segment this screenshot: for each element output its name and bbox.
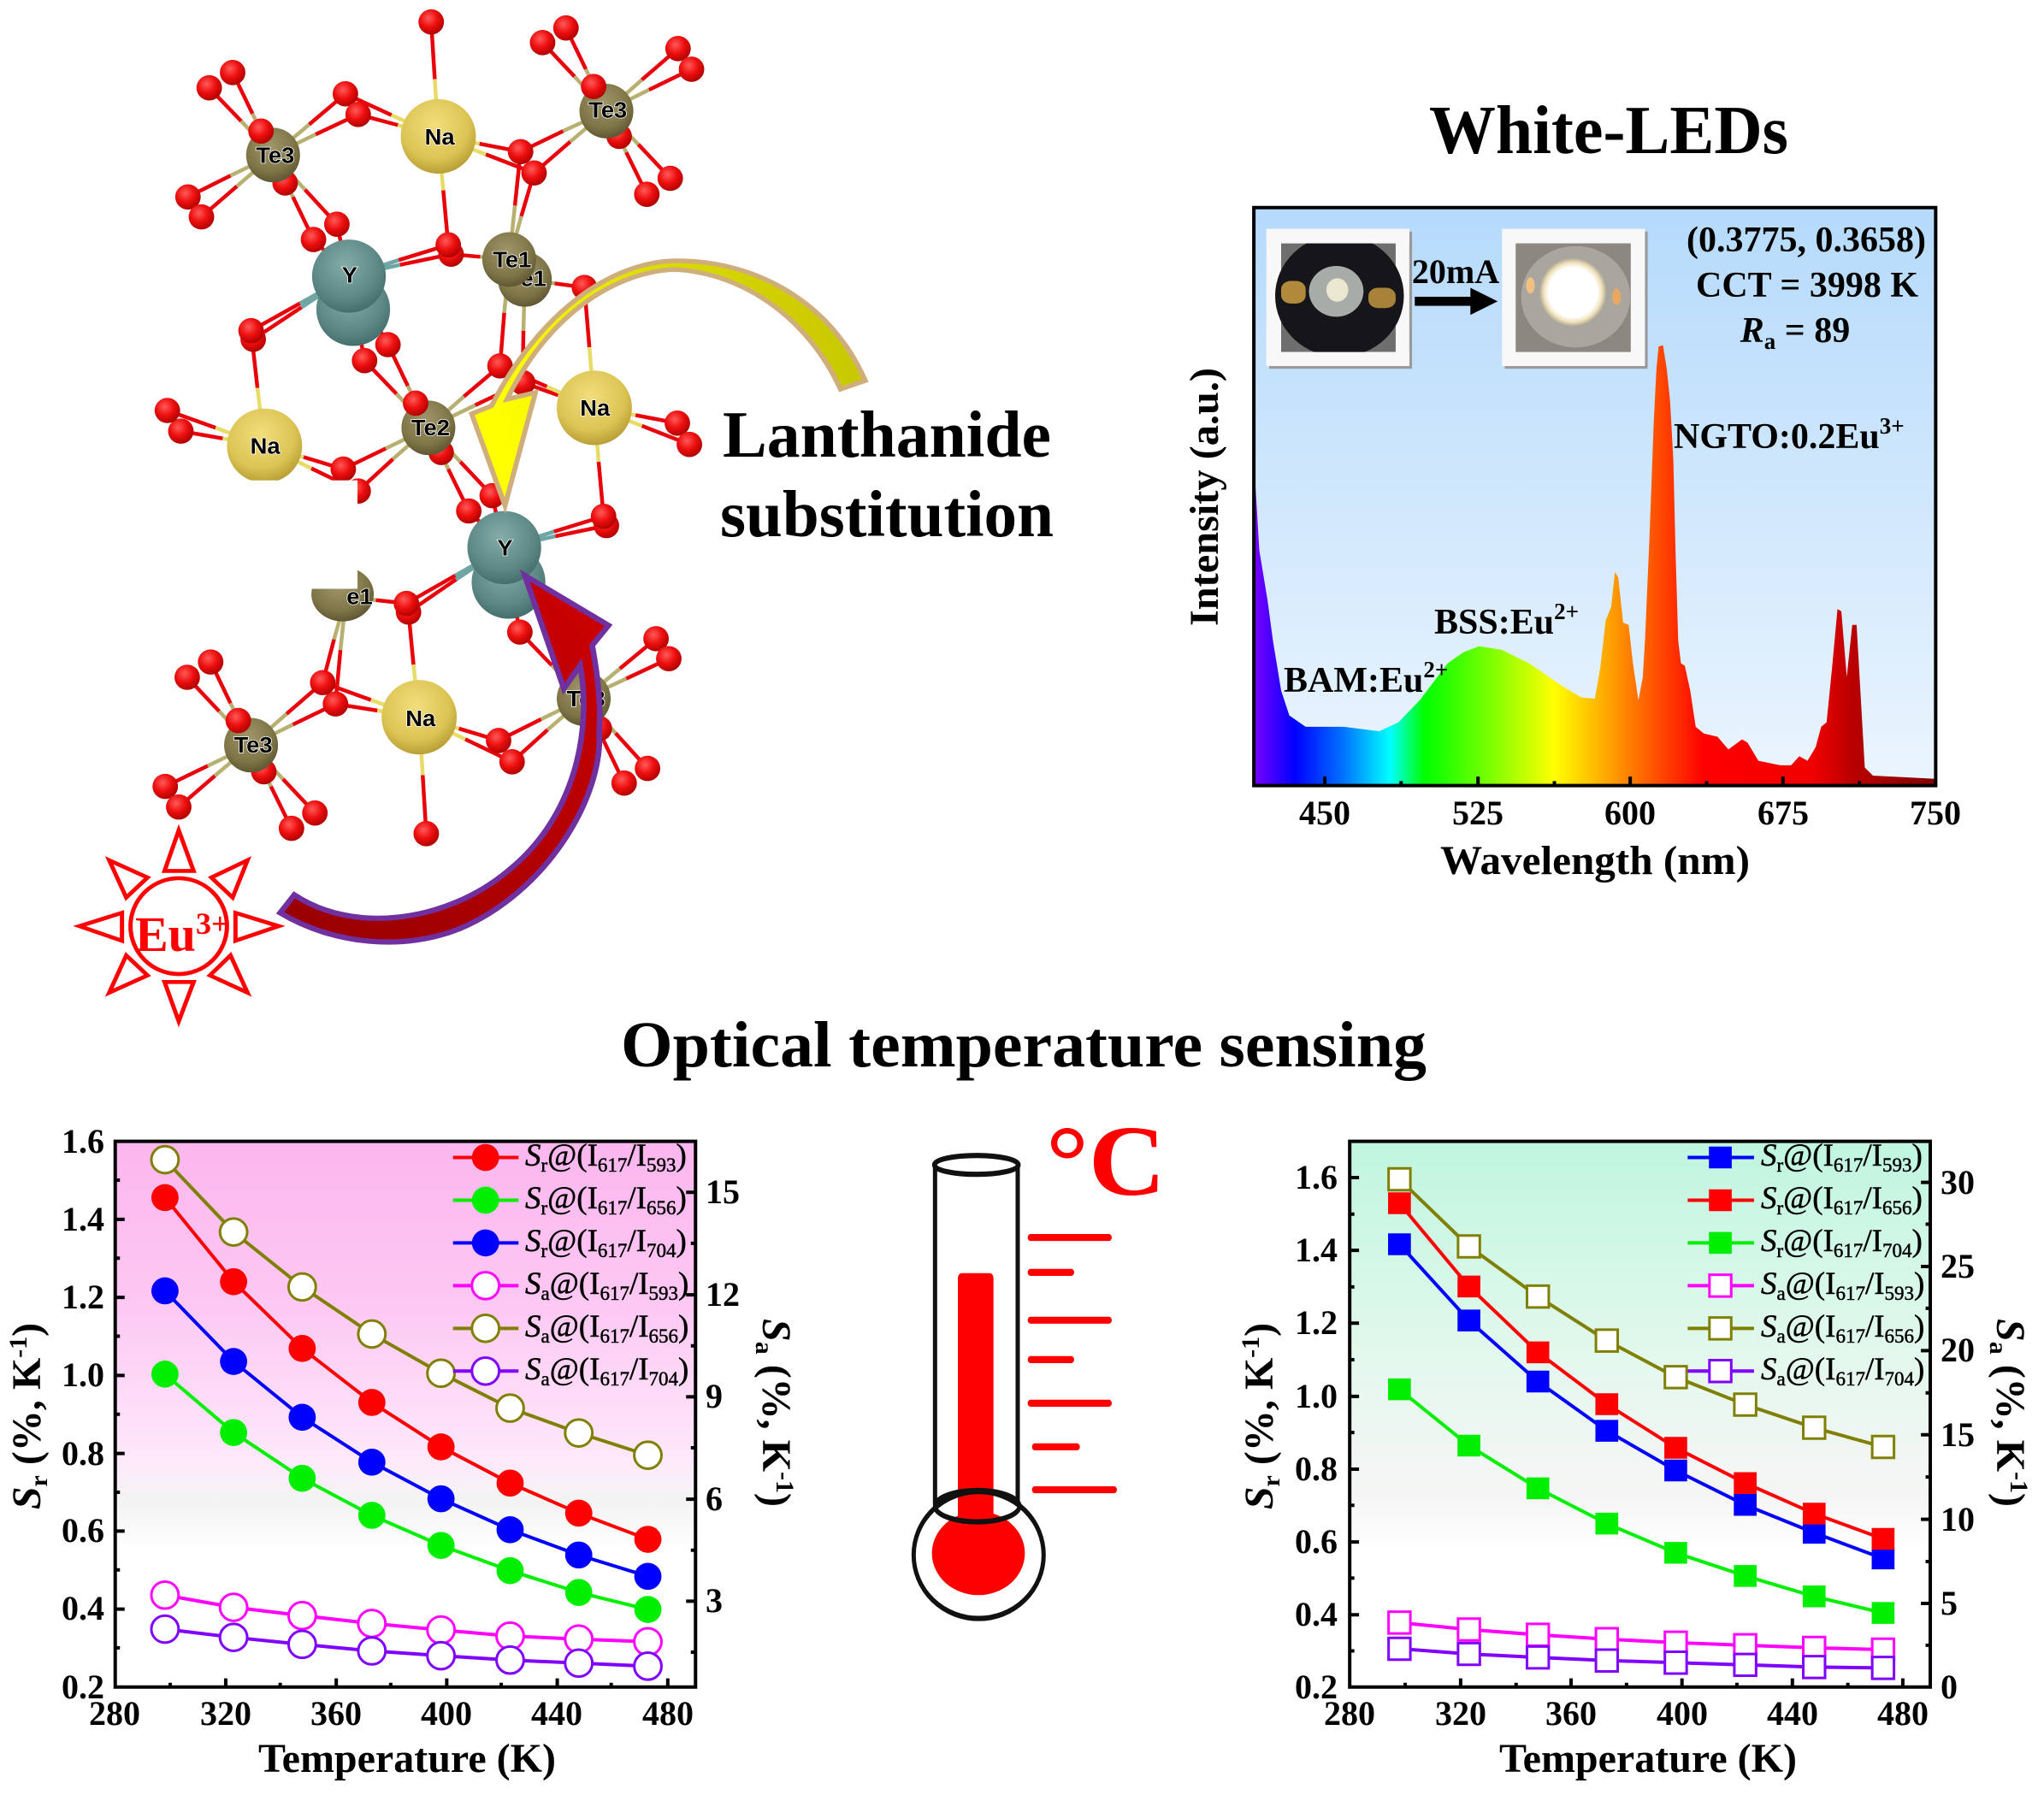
legend text: S xyxy=(525,1352,541,1387)
series: Sr I617/I656 xyxy=(1388,1192,1894,1550)
bottom axis tick labels: 320 xyxy=(200,1694,251,1733)
legend text: 656 xyxy=(1885,1326,1914,1347)
left axis tick labels: 1.0 xyxy=(62,1355,104,1394)
left y-axis title: r xyxy=(25,1475,53,1486)
legend text: 656 xyxy=(649,1326,678,1347)
right axis tick labels: 3 xyxy=(706,1581,723,1620)
oxygen atoms xyxy=(168,9,704,784)
bottom axis tick labels: 400 xyxy=(1657,1694,1708,1733)
legend text: S xyxy=(525,1181,541,1216)
bottom axis tick labels xyxy=(89,1694,694,1733)
legend text: @(I xyxy=(1786,1267,1835,1302)
bottom axis tick labels xyxy=(1324,1694,1929,1733)
icon: thermometer xyxy=(913,1155,1114,1619)
left axis tick labels: 1.6 xyxy=(1295,1158,1338,1196)
panel: White-LED spectrum xyxy=(1182,208,1961,883)
legend text: ) xyxy=(678,1309,688,1344)
legend text: 593 xyxy=(1882,1154,1912,1176)
right axis tick labels: 30 xyxy=(1941,1163,1975,1202)
x-axis tick labels: 600 xyxy=(1604,794,1656,832)
front atoms xyxy=(152,74,702,847)
legend text: a xyxy=(1777,1326,1786,1347)
legend text: /I xyxy=(627,1224,647,1259)
right axis tick labels: 25 xyxy=(1941,1247,1975,1285)
right axis tick labels: 15 xyxy=(706,1172,740,1211)
atom labels: Na xyxy=(405,706,436,731)
series: Sr I617/I656 xyxy=(151,1361,661,1623)
mercury xyxy=(932,1273,1025,1595)
x-axis tick labels: 450 xyxy=(1299,794,1350,832)
bonds xyxy=(165,22,692,834)
legend text: a xyxy=(1777,1368,1786,1390)
legend text: r xyxy=(1777,1197,1784,1219)
right axis tick labels: 5 xyxy=(1941,1584,1958,1622)
legend text: @(I xyxy=(547,1138,598,1173)
left y-axis title: ) xyxy=(4,1323,50,1337)
legend text: /I xyxy=(627,1181,647,1216)
x-axis tick labels xyxy=(1299,794,1961,832)
atom labels: Te3 xyxy=(588,97,627,123)
legend text: /I xyxy=(1863,1181,1882,1216)
x-axis tick labels: 525 xyxy=(1452,794,1503,832)
Eu3+ label: Eu xyxy=(135,906,196,962)
legend text: /I xyxy=(629,1309,649,1344)
right axis tick labels: 12 xyxy=(706,1275,740,1314)
y-axis title: Intensity (a.u.) xyxy=(1182,368,1227,626)
right axis tick labels: 0 xyxy=(1941,1668,1958,1706)
left y-axis title: -1 xyxy=(1237,1337,1265,1358)
legend text: 617 xyxy=(598,1240,627,1261)
series: Sa I617/I704 xyxy=(1389,1638,1894,1679)
legend text: @(I xyxy=(550,1309,600,1344)
arrow: Eu3+ doping (red) xyxy=(281,576,609,942)
x-axis tick labels: 675 xyxy=(1757,794,1809,832)
bottom axis tick labels: 480 xyxy=(1877,1694,1929,1733)
right axis tick labels: 9 xyxy=(706,1377,723,1415)
atom labels: Te3 xyxy=(256,143,294,168)
legend text: a xyxy=(541,1283,550,1304)
left y-axis title: S xyxy=(4,1486,50,1509)
LED coordinates: (0.3775, 0.3658) xyxy=(1687,221,1926,260)
legend text: r xyxy=(1777,1154,1784,1176)
bottom axis tick labels: 280 xyxy=(1324,1694,1375,1733)
atom labels: Na xyxy=(580,396,611,421)
left axis tick labels: 0.2 xyxy=(1295,1668,1338,1706)
left axis tick labels: 1.0 xyxy=(1295,1377,1338,1415)
heading: Lanthanide substitution xyxy=(720,398,1054,551)
series: Sr I617/I593 xyxy=(151,1184,661,1553)
legend markers xyxy=(1687,1147,1754,1382)
legend text: r xyxy=(1777,1240,1784,1261)
inset photo: LED off xyxy=(1267,229,1412,369)
label: BSS: 2+ xyxy=(1554,599,1579,624)
atom labels: Y xyxy=(497,535,513,560)
LED coordinates: a xyxy=(1764,328,1776,354)
LED coordinates: CCT = 3998 K xyxy=(1696,266,1918,305)
legend text: S xyxy=(1761,1181,1777,1216)
legend text: 617 xyxy=(600,1326,629,1347)
legend text: S xyxy=(1761,1138,1777,1173)
right y-axis title: S xyxy=(753,1319,799,1342)
right y-axis title: -1 xyxy=(771,1472,799,1493)
x-axis tick labels: 750 xyxy=(1910,794,1961,832)
legend text: 593 xyxy=(649,1283,678,1304)
left axis tick labels xyxy=(1295,1158,1338,1706)
legend text: ) xyxy=(1914,1267,1924,1302)
left axis tick labels: 0.4 xyxy=(1295,1595,1338,1633)
LED coordinates xyxy=(1687,221,1926,354)
left y-axis title: (%, K xyxy=(1237,1358,1282,1475)
bottom axis tick labels: 280 xyxy=(89,1694,140,1733)
scale marks xyxy=(1031,1237,1114,1490)
axes and ticks xyxy=(1350,1142,1930,1687)
right y-axis title: (%, K xyxy=(753,1355,799,1472)
legend text: 617 xyxy=(598,1197,627,1219)
left axis tick labels: 0.6 xyxy=(1295,1522,1338,1561)
white mask over the middle of the structure xyxy=(142,481,357,589)
bottom axis tick labels: 360 xyxy=(310,1694,362,1733)
legend text: 656 xyxy=(647,1197,676,1219)
legend text: 617 xyxy=(1834,1154,1863,1176)
x-axis title: Temperature (K) xyxy=(258,1736,556,1781)
legend text: @(I xyxy=(550,1267,600,1302)
legend text: 656 xyxy=(1882,1197,1912,1219)
atom labels xyxy=(234,97,627,758)
legend text: @(I xyxy=(1783,1224,1834,1259)
legend text: /I xyxy=(1865,1352,1885,1387)
series: Sr I617/I593 xyxy=(1388,1233,1894,1569)
left axis tick labels: 0.8 xyxy=(62,1434,104,1473)
back atoms: e1 xyxy=(520,266,546,291)
atom labels: Na xyxy=(251,434,281,458)
label: NGTO: 3+ xyxy=(1880,413,1905,439)
legend text: ) xyxy=(1912,1224,1923,1259)
label: BSS: BSS:Eu xyxy=(1434,603,1554,642)
right axis tick labels: 15 xyxy=(1941,1415,1975,1454)
right y-axis title: -1 xyxy=(2005,1472,2033,1493)
right axis tick labels: 20 xyxy=(1941,1331,1975,1369)
left y-axis title: S xyxy=(1237,1486,1282,1509)
right y-axis title: ) xyxy=(753,1493,799,1507)
atom labels: Na xyxy=(425,125,455,150)
legend text: r xyxy=(541,1197,547,1219)
legend text: /I xyxy=(1865,1309,1885,1344)
legend text: 704 xyxy=(649,1368,679,1390)
series: Sa I617/I656 xyxy=(1389,1168,1894,1458)
legend text: ) xyxy=(1914,1352,1924,1387)
legend text: @(I xyxy=(547,1224,598,1259)
bottom axis tick labels: 440 xyxy=(1767,1694,1818,1733)
back atoms xyxy=(316,252,552,619)
left y-axis title: r xyxy=(1257,1475,1285,1486)
legend text: /I xyxy=(1863,1138,1882,1173)
legend text: ) xyxy=(678,1267,688,1302)
left y-axis title: (%, K xyxy=(4,1358,50,1475)
chart: left sensitivity (circles) xyxy=(4,1122,799,1781)
legend text: S xyxy=(1761,1224,1777,1259)
emission spectrum xyxy=(1255,345,1935,786)
legend text: 704 xyxy=(647,1240,676,1261)
legend text: S xyxy=(525,1138,541,1173)
heading: Lanthanide substitution: substitution xyxy=(720,477,1054,551)
series: Sa I617/I656 xyxy=(151,1146,661,1468)
crystal structure with lanthanide substitution xyxy=(80,9,865,1021)
legend markers xyxy=(453,1144,518,1385)
icon: degree Celsius: °C xyxy=(1046,1105,1166,1217)
atom labels: Te2 xyxy=(411,416,450,440)
legend text: a xyxy=(541,1326,550,1347)
legend text: @(I xyxy=(1786,1309,1835,1344)
bottom axis tick labels: 480 xyxy=(642,1694,694,1733)
arrow: 20mA xyxy=(1415,287,1498,315)
legend text: @(I xyxy=(1783,1181,1834,1216)
plot area xyxy=(1350,1142,1930,1687)
legend text: 617 xyxy=(1834,1197,1863,1219)
series: Sa I617/I704 xyxy=(151,1615,661,1680)
legend text: S xyxy=(525,1224,541,1259)
icon: Eu3+ sun xyxy=(80,830,279,1021)
bottom axis tick labels: 360 xyxy=(1545,1694,1597,1733)
legend text: @(I xyxy=(1783,1138,1834,1173)
heading: Lanthanide substitution: Lanthanide xyxy=(723,398,1051,471)
legend text: r xyxy=(541,1240,547,1261)
legend text: 704 xyxy=(1882,1240,1912,1261)
spectrum plot xyxy=(1254,208,1935,786)
left axis tick labels: 1.4 xyxy=(1295,1231,1338,1269)
left axis tick labels: 1.2 xyxy=(62,1278,104,1316)
atom labels: Te3 xyxy=(566,687,606,712)
axes frame xyxy=(1254,208,1935,786)
legend text: ) xyxy=(676,1138,687,1173)
legend text: ) xyxy=(676,1181,687,1216)
bottom axis tick labels: 440 xyxy=(531,1694,582,1733)
legend text: 617 xyxy=(1834,1240,1863,1261)
Eu3+ label: 3+ xyxy=(196,906,228,941)
legend text: /I xyxy=(627,1138,647,1173)
legend text: @(I xyxy=(550,1352,600,1387)
chart: right sensitivity (squares) xyxy=(1237,1138,2033,1781)
legend text: S xyxy=(1761,1309,1777,1344)
legend text: ) xyxy=(1912,1138,1923,1173)
left axis tick labels: 1.2 xyxy=(1295,1303,1338,1342)
label: BAM: BAM:Eu xyxy=(1284,661,1423,700)
legend text: /I xyxy=(629,1267,649,1302)
legend text: @(I xyxy=(1786,1352,1835,1387)
left axis tick labels: 0.6 xyxy=(62,1511,104,1550)
right axis tick labels: 6 xyxy=(706,1479,723,1518)
left y-axis title: ) xyxy=(1237,1323,1282,1337)
series: Sa I617/I593 xyxy=(1389,1612,1894,1661)
right axis tick labels xyxy=(706,1172,740,1620)
right y-axis title: S xyxy=(1988,1319,2033,1342)
legend text: a xyxy=(541,1368,550,1390)
left axis tick labels: 1.6 xyxy=(62,1122,104,1160)
label: BAM: 2+ xyxy=(1423,657,1448,682)
axes and ticks xyxy=(115,1142,695,1687)
left axis tick labels: 0.2 xyxy=(62,1668,104,1706)
legend text: S xyxy=(525,1309,541,1344)
right axis tick labels: 10 xyxy=(1941,1500,1975,1538)
left axis tick labels: 0.8 xyxy=(1295,1450,1338,1488)
legend text: ) xyxy=(678,1352,688,1387)
legend text: a xyxy=(1777,1283,1786,1304)
arrow: lanthanide substitution (yellow) xyxy=(471,261,865,505)
legend text: 704 xyxy=(1885,1368,1915,1390)
label: 20mA: 20mA xyxy=(1412,252,1499,291)
heading: White-LEDs: White-LEDs xyxy=(1429,93,1788,168)
legend text: @(I xyxy=(547,1181,598,1216)
right y-axis title: a xyxy=(1984,1342,2012,1355)
legend text: 593 xyxy=(647,1154,676,1176)
glass outline xyxy=(913,1155,1043,1619)
legend text: ) xyxy=(676,1224,687,1259)
inset photo: LED on xyxy=(1502,229,1648,369)
LED coordinates: = 89 xyxy=(1775,311,1850,351)
legend text: /I xyxy=(1863,1224,1882,1259)
left axis tick labels: 1.4 xyxy=(62,1200,104,1238)
legend text: ) xyxy=(1914,1309,1924,1344)
right axis tick labels xyxy=(1941,1163,1975,1706)
atom labels: e1 xyxy=(346,584,373,609)
series: Sr I617/I704 xyxy=(1388,1379,1894,1624)
legend text: 617 xyxy=(1835,1368,1865,1390)
legend text: 617 xyxy=(1835,1326,1865,1347)
legend text: 593 xyxy=(1885,1283,1914,1304)
left axis tick labels: 0.4 xyxy=(62,1589,104,1627)
legend text: 617 xyxy=(598,1154,627,1176)
x-axis title: Wavelength (nm) xyxy=(1440,838,1750,883)
LED coordinates: R xyxy=(1740,311,1764,351)
legend text xyxy=(525,1138,688,1390)
legend text: ) xyxy=(1912,1181,1923,1216)
heading: Optical temperature sensing: Optical temperature sensing xyxy=(621,1009,1427,1081)
atom labels: Y xyxy=(342,263,357,287)
left y-axis title: -1 xyxy=(4,1337,32,1358)
legend text: S xyxy=(1761,1267,1777,1302)
legend text: /I xyxy=(629,1352,649,1387)
atom labels: Te1 xyxy=(493,248,532,273)
legend text: r xyxy=(541,1154,547,1176)
right y-axis title: (%, K xyxy=(1988,1355,2033,1472)
legend text: /I xyxy=(1865,1267,1885,1302)
left axis tick labels xyxy=(62,1122,104,1706)
legend text: S xyxy=(1761,1352,1777,1387)
series: Sa I617/I593 xyxy=(151,1581,661,1656)
legend text: 617 xyxy=(1835,1283,1865,1304)
bottom axis tick labels: 400 xyxy=(421,1694,472,1733)
legend text: S xyxy=(525,1267,541,1302)
label: NGTO: NGTO:0.2Eu xyxy=(1674,417,1880,457)
legend text: 617 xyxy=(600,1283,629,1304)
legend text: 617 xyxy=(600,1368,629,1390)
plot area xyxy=(115,1142,695,1687)
legend text xyxy=(1761,1138,1924,1390)
bottom axis tick labels: 320 xyxy=(1435,1694,1486,1733)
right y-axis title: a xyxy=(750,1342,778,1355)
right y-axis title: ) xyxy=(1988,1493,2033,1507)
series: Sr I617/I704 xyxy=(151,1278,661,1590)
atom labels: Te3 xyxy=(234,733,273,758)
x-axis title: Temperature (K) xyxy=(1499,1736,1797,1781)
